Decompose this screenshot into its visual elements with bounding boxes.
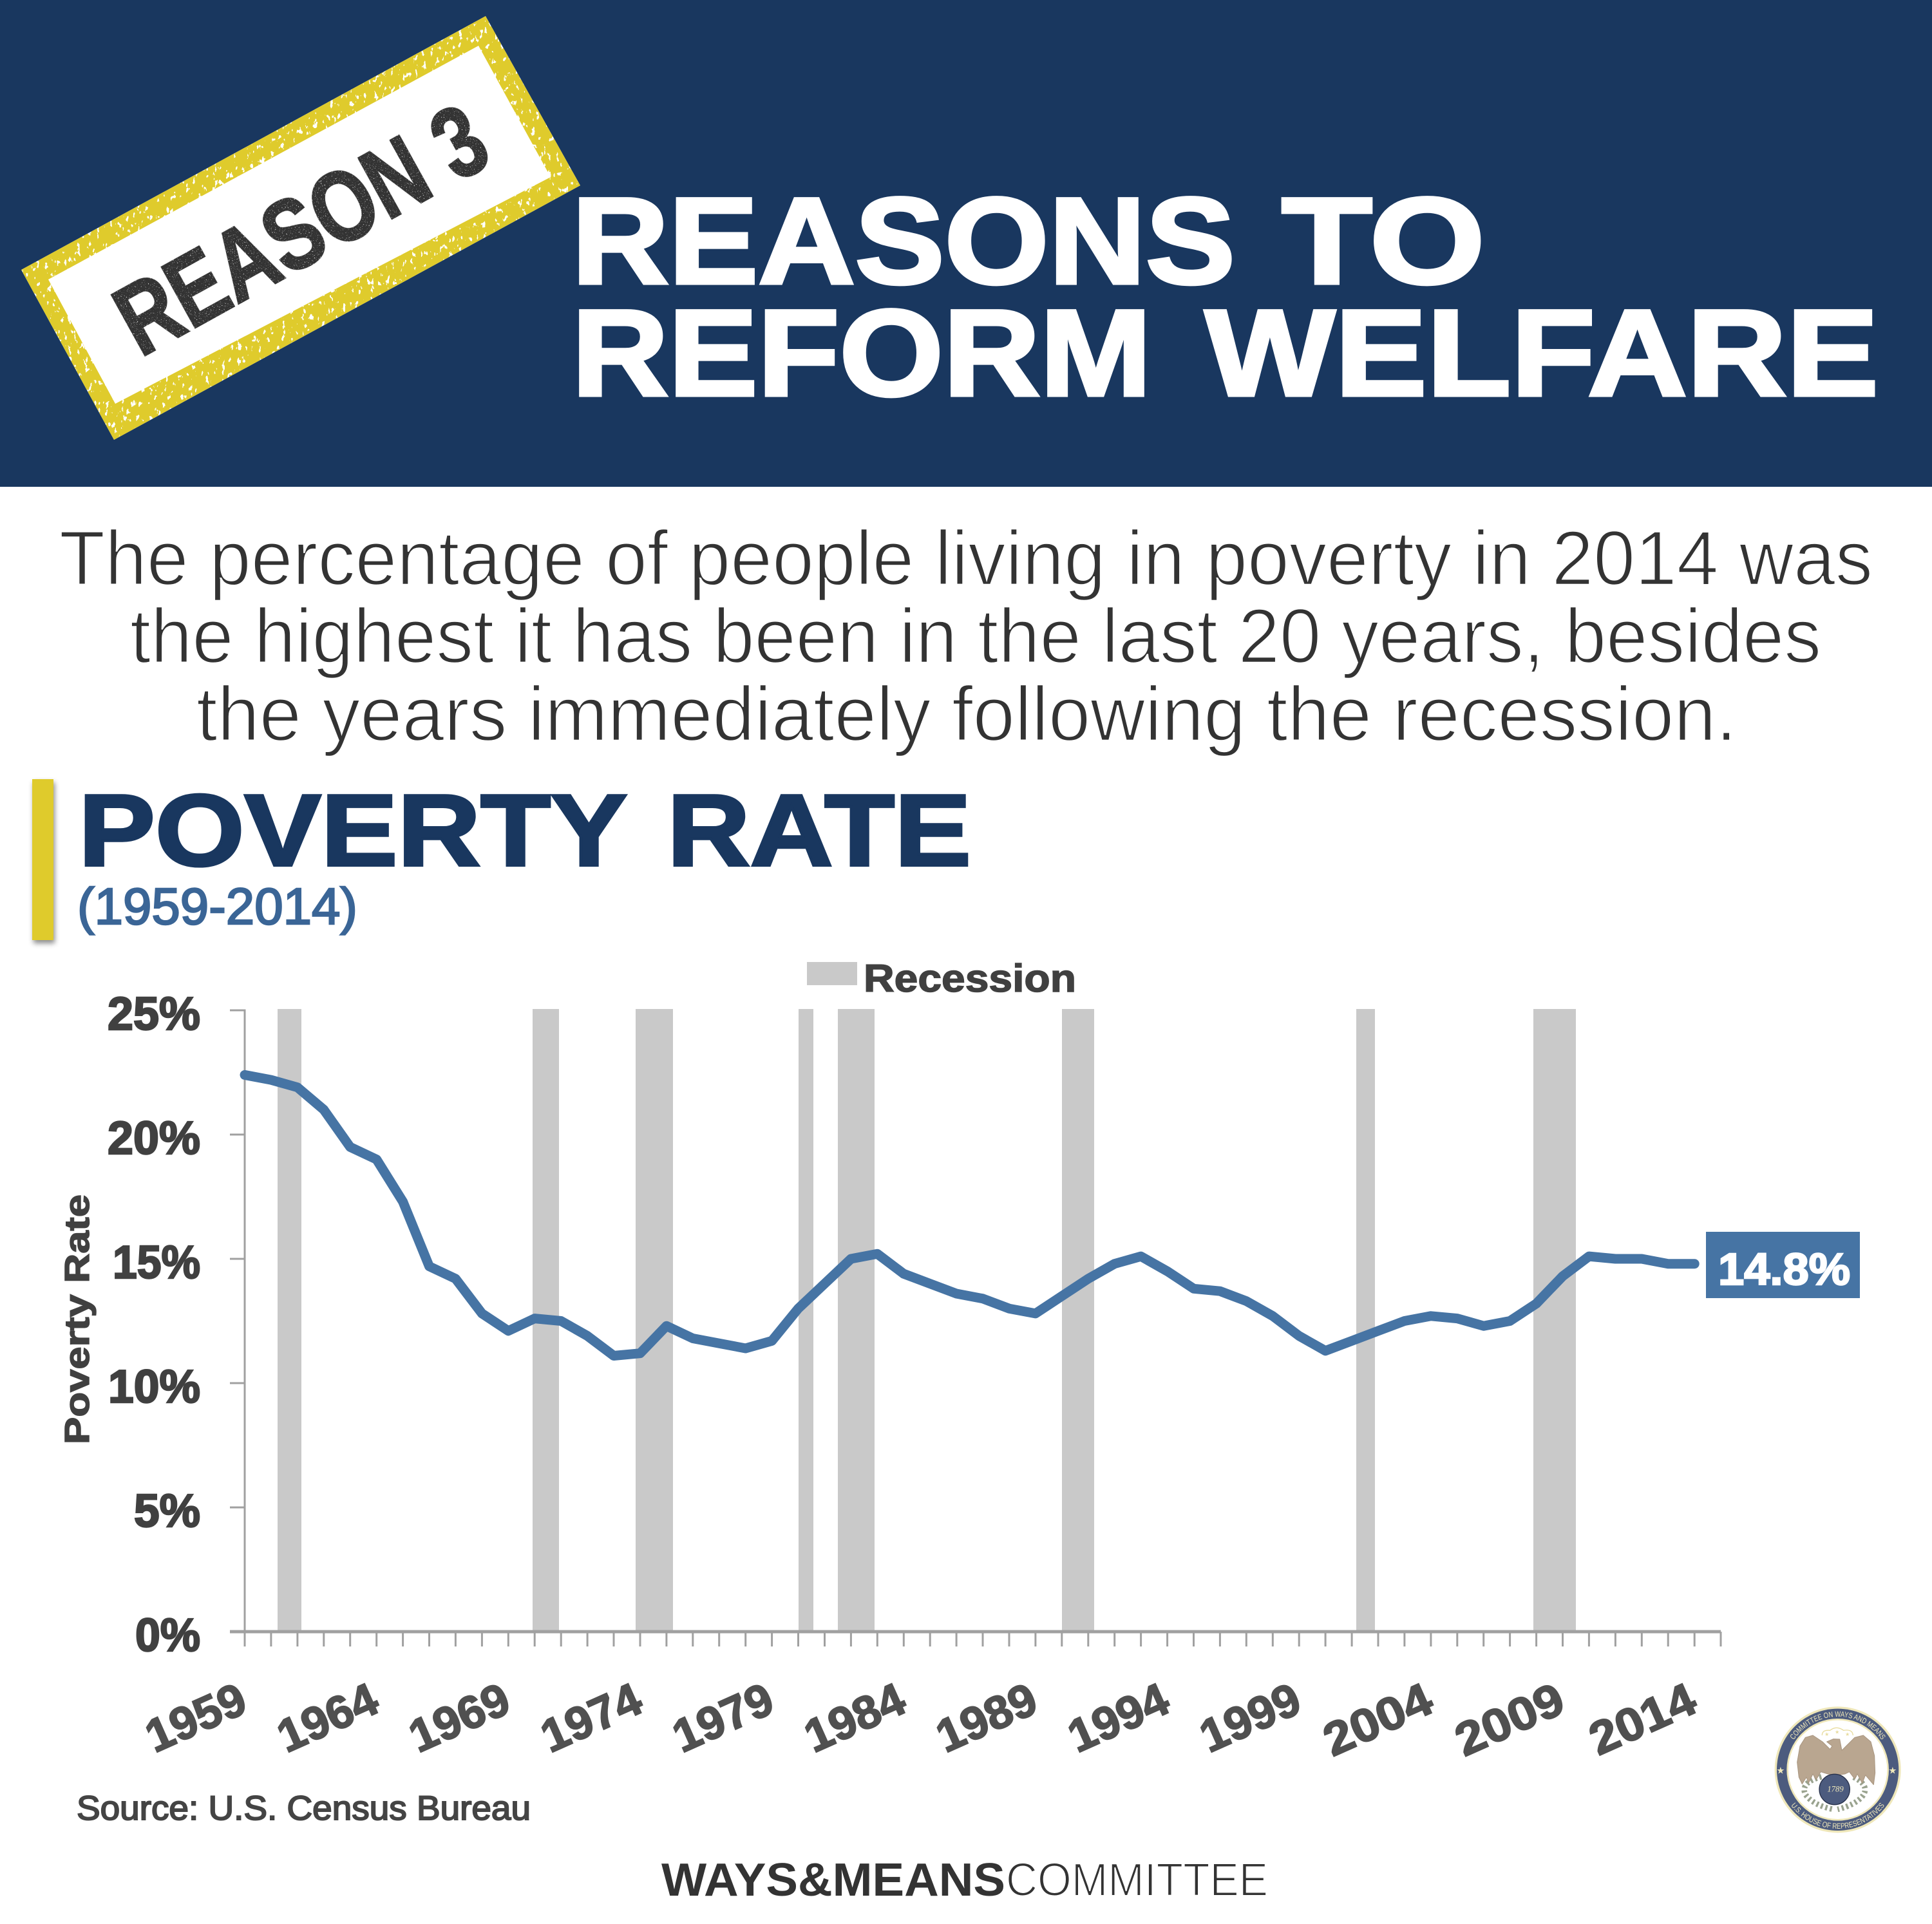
title: WELFARE bbox=[1205, 285, 1879, 422]
seal globe bbox=[1819, 1774, 1850, 1805]
seal eagle bbox=[1797, 1735, 1875, 1785]
seal top text: COMMITTEE ON WAYS AND MEANS bbox=[1790, 1712, 1886, 1740]
seal bottom text: U.S. HOUSE OF REPRESENTATIVES bbox=[1792, 1802, 1884, 1829]
intro text block: the highest it has been in the last 20 years, besides bbox=[130, 593, 1821, 679]
committee wordmark bbox=[661, 1854, 1268, 1906]
y axis labels: 15% bbox=[113, 1237, 200, 1288]
callout: 14.8% bbox=[1706, 1232, 1860, 1298]
legend: recession bbox=[807, 957, 1076, 1000]
x axis year labels: 1989 bbox=[929, 1674, 1045, 1763]
seal: committee on ways and means bbox=[1775, 1706, 1901, 1833]
callout value: 14.8% bbox=[1718, 1244, 1850, 1294]
y axis labels: 0% bbox=[135, 1610, 200, 1661]
legend label: Recession bbox=[864, 957, 1076, 1000]
x axis year labels: 1969 bbox=[401, 1674, 518, 1763]
recession bars bbox=[278, 1009, 1576, 1630]
seal side stars bbox=[1776, 1766, 1897, 1776]
intro text block: The percentage of people living in poverty in 2014 was bbox=[59, 515, 1873, 601]
x axis year labels bbox=[138, 1674, 1704, 1766]
seal crest stars: ★ bbox=[1835, 1730, 1839, 1735]
committee wordmark: COMMITTEE bbox=[1006, 1854, 1268, 1906]
y axis labels: 5% bbox=[134, 1485, 200, 1537]
y axis labels: 10% bbox=[108, 1361, 200, 1413]
header banner bbox=[0, 0, 1932, 487]
x axis year labels: 2014 bbox=[1582, 1674, 1704, 1766]
y axis labels: 25% bbox=[108, 988, 200, 1040]
x axis year labels: 1984 bbox=[797, 1674, 913, 1763]
x axis year labels: 1959 bbox=[138, 1674, 254, 1763]
title bbox=[572, 173, 1879, 422]
seal side stars: ★ bbox=[1776, 1766, 1785, 1776]
chart subheading: (1959-2014) bbox=[77, 878, 357, 935]
y axis title: Poverty Rate bbox=[58, 1194, 97, 1444]
y axis labels bbox=[108, 988, 200, 1661]
seal wreath bbox=[1804, 1777, 1865, 1809]
intro text block: the years immediately following the recession. bbox=[196, 671, 1737, 757]
chart heading: RATE bbox=[667, 774, 971, 887]
y axis labels: 20% bbox=[108, 1113, 200, 1164]
seal crest stars bbox=[1822, 1728, 1853, 1737]
callout box bbox=[1706, 1232, 1860, 1298]
stamp text: REASON 3 bbox=[97, 82, 506, 377]
seal side stars: ★ bbox=[1888, 1766, 1897, 1776]
x axis year labels: 1964 bbox=[270, 1674, 386, 1763]
title: REFORM bbox=[572, 285, 1151, 422]
committee wordmark: WAYS&MEANS bbox=[661, 1854, 1005, 1906]
x axis year labels: 1974 bbox=[533, 1674, 650, 1763]
title: TO bbox=[1282, 173, 1485, 310]
seal crest stars: ★ bbox=[1824, 1731, 1829, 1737]
seal outer ring bbox=[1775, 1706, 1901, 1833]
x axis year labels: 1979 bbox=[665, 1674, 781, 1763]
legend swatch bbox=[807, 962, 857, 985]
axes and ticks bbox=[230, 1010, 1721, 1646]
source note: Source: U.S. Census Bureau bbox=[77, 1789, 531, 1827]
seal year: 1789 bbox=[1827, 1784, 1844, 1793]
x axis baseline bbox=[230, 1630, 1721, 1633]
intro text block bbox=[59, 515, 1873, 757]
title: REASONS bbox=[572, 173, 1235, 310]
yellow accent bar bbox=[32, 779, 53, 940]
line chart: poverty rate bbox=[230, 1009, 1721, 1646]
x axis year labels: 2009 bbox=[1448, 1674, 1572, 1766]
seal crest stars: ★ bbox=[1845, 1731, 1850, 1737]
x axis year labels: 1994 bbox=[1060, 1674, 1177, 1763]
chart heading: POVERTY bbox=[79, 774, 627, 887]
stamp yellow distressed border bbox=[21, 16, 580, 440]
x axis year labels: 2004 bbox=[1316, 1674, 1440, 1766]
chart heading bbox=[79, 774, 971, 887]
x axis year labels: 1999 bbox=[1192, 1674, 1309, 1763]
poverty rate line bbox=[245, 1075, 1694, 1356]
stamp white backing bbox=[21, 16, 580, 440]
stamp: reason 3 bbox=[21, 16, 580, 440]
